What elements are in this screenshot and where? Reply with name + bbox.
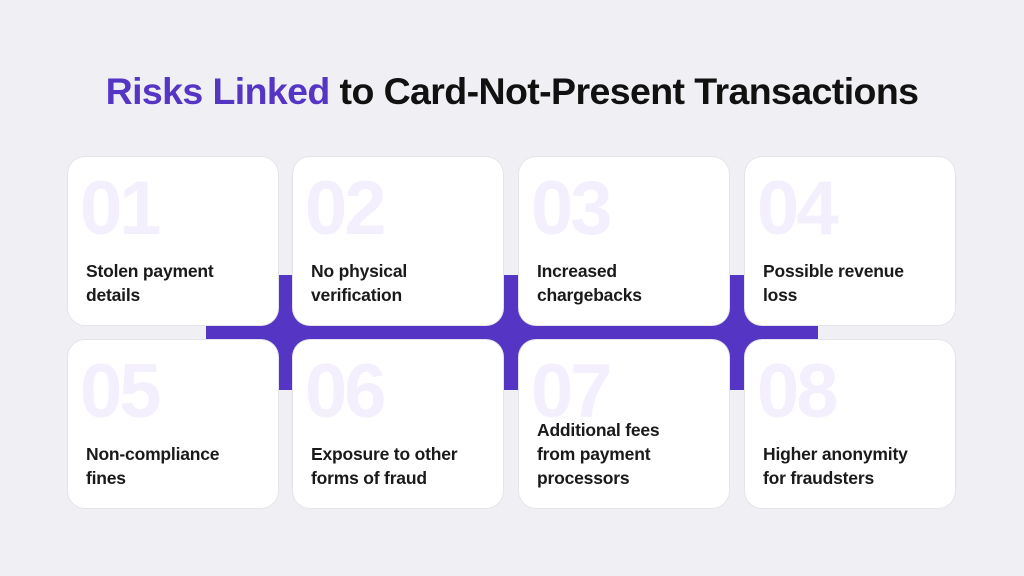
title: Risks Linked to Card-Not-Present Transactions bbox=[106, 70, 918, 112]
card 01 bbox=[68, 157, 278, 325]
card 07: Additional fees bbox=[537, 420, 659, 440]
card 07 bbox=[519, 340, 729, 508]
card 04: 04 bbox=[757, 166, 836, 251]
card 03: 03 bbox=[531, 166, 610, 251]
card 06 bbox=[293, 340, 503, 508]
card 02 bbox=[293, 157, 503, 325]
card 01: details bbox=[86, 285, 140, 305]
card 06: 06 bbox=[305, 349, 384, 434]
card 08: 08 bbox=[757, 349, 836, 434]
purple connector band bbox=[206, 275, 818, 390]
card 06: Exposure to other bbox=[311, 444, 457, 464]
card 04 bbox=[745, 157, 955, 325]
card 02: verification bbox=[311, 285, 402, 305]
card 03 bbox=[519, 157, 729, 325]
card 04: loss bbox=[763, 285, 797, 305]
card 06: forms of fraud bbox=[311, 468, 427, 488]
card 02: No physical bbox=[311, 261, 407, 281]
card 03: Increased bbox=[537, 261, 617, 281]
card 03: chargebacks bbox=[537, 285, 642, 305]
card 05: Non-compliance bbox=[86, 444, 219, 464]
card 07: processors bbox=[537, 468, 629, 488]
card 08: Higher anonymity bbox=[763, 444, 908, 464]
card 05: fines bbox=[86, 468, 126, 488]
card 04: Possible revenue bbox=[763, 261, 904, 281]
card 07: from payment bbox=[537, 444, 650, 464]
card 08 bbox=[745, 340, 955, 508]
card 08: for fraudsters bbox=[763, 468, 874, 488]
card 02: 02 bbox=[305, 166, 384, 251]
card 05 bbox=[68, 340, 278, 508]
card 05: 05 bbox=[80, 349, 159, 434]
card 07: 07 bbox=[531, 349, 610, 434]
card 01: 01 bbox=[80, 166, 159, 251]
card 01: Stolen payment bbox=[86, 261, 214, 281]
